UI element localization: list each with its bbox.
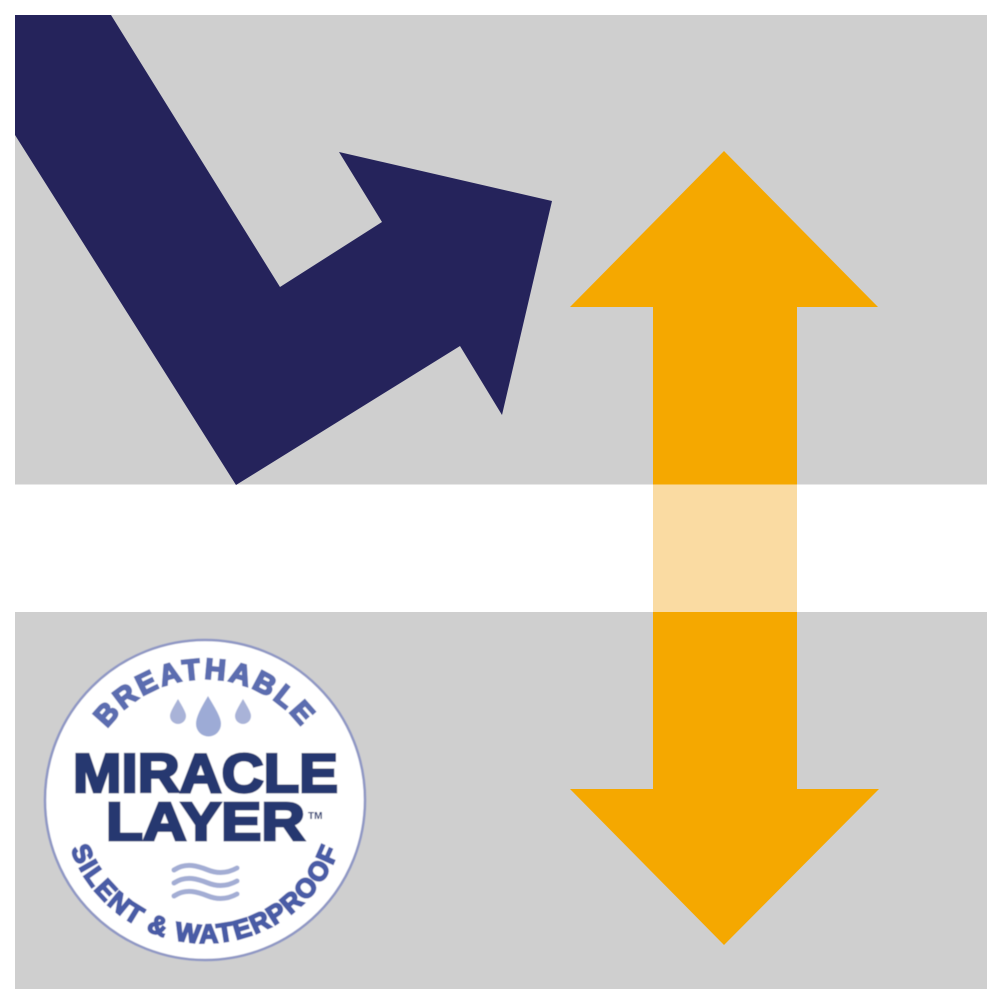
panel: upper grey band (15, 15, 987, 484)
arrow: orange double-headed vertical arrow (570, 151, 879, 945)
text: trademark: TM (308, 811, 322, 822)
icon: water drops (170, 696, 251, 736)
badge: Miracle Layer seal (43, 638, 367, 962)
text: BREATHABLE: BREATHABLE (91, 657, 317, 729)
text: LAYER: LAYER (106, 792, 305, 852)
panel: lower grey band (15, 612, 987, 989)
arrow: navy deflected arrow (15, 15, 552, 485)
icon: water waves (174, 865, 237, 898)
text: SILENT & WATERPROOF: SILENT & WATERPROOF (71, 842, 336, 945)
text: MIRACLE: MIRACLE (73, 742, 338, 804)
